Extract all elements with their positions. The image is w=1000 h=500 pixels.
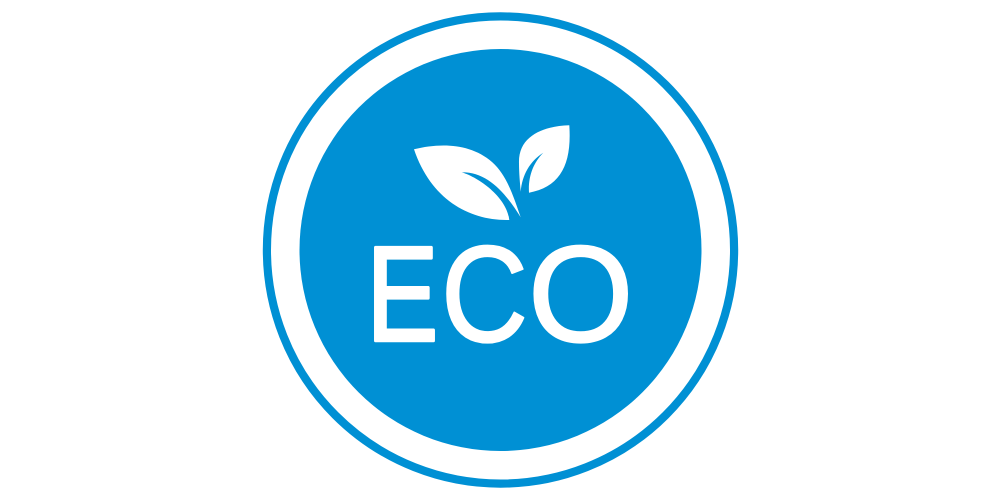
icon: leaves [414,125,570,220]
outer ring [267,16,734,484]
inner filled disc [300,49,702,451]
letter O: O [528,218,633,370]
wordmark: ECO [367,218,633,371]
letter E: E [367,219,438,369]
icon: large leaf [414,146,521,220]
icon: small leaf [519,125,570,193]
letter C: C [441,218,528,371]
